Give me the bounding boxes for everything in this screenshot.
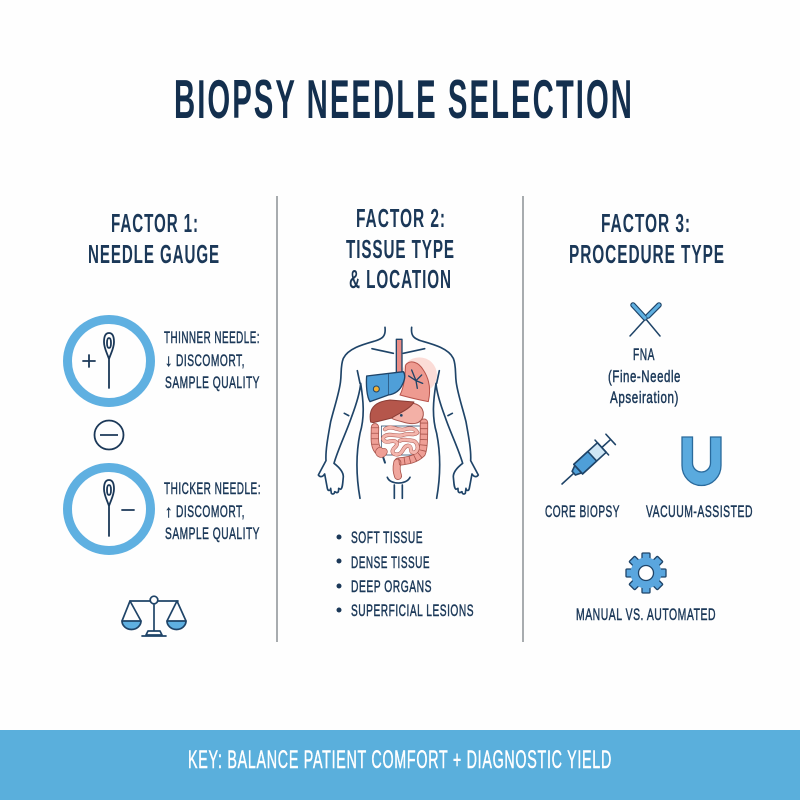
icon: gear — [626, 553, 666, 593]
label: FNA: FNA — [633, 345, 655, 364]
heading: factor 1: FACTOR 1: — [111, 208, 199, 238]
organ: liver — [366, 372, 405, 402]
organ: stomach — [391, 403, 423, 424]
label: core biopsy: CORE BIOPSY — [545, 502, 620, 521]
panel: factor 2 tissue type — [318, 203, 478, 620]
heading: factor 2: & LOCATION — [349, 264, 452, 294]
text: thicker needle: ↑ — [165, 502, 173, 521]
label: manual vs automated: MANUAL VS. AUTOMATED — [576, 605, 716, 624]
organ: lung glow — [402, 357, 437, 393]
organ: esophagus — [396, 339, 402, 373]
heading: factor 3 — [569, 208, 725, 269]
text: thinner needle: ↓ — [165, 351, 173, 370]
text: thicker needle: THICKER NEEDLE: — [164, 479, 261, 498]
text: thinner needle — [164, 328, 260, 392]
icon: crossed FNA needles — [630, 305, 660, 336]
organ: small intestine — [383, 428, 418, 454]
illustration: human torso with organs — [318, 327, 478, 498]
icon: thin needle in ring — [68, 320, 150, 402]
heading: factor 2 — [346, 203, 455, 294]
bullet list: tissue types: DEEP ORGANS — [351, 577, 432, 596]
label: FNA: Apseiration) — [610, 388, 679, 407]
icon: vacuum U-shape — [682, 437, 721, 486]
text: thinner needle: THINNER NEEDLE: — [164, 328, 260, 347]
organ: colon — [375, 423, 424, 476]
organ: lung — [400, 362, 430, 402]
heading: factor 2: FACTOR 2: — [356, 203, 446, 233]
tumor marker — [373, 386, 379, 392]
icon: thick needle in ring — [68, 468, 150, 550]
text: thinner needle: DISCOMORT, — [176, 351, 245, 370]
bullet list: tissue types — [336, 528, 474, 620]
text: thicker needle: DISCOMORT, — [176, 502, 245, 521]
bullet list: tissue types: SUPERFICIAL LESIONS — [351, 601, 474, 620]
panel: factor 1 needle gauge — [68, 208, 261, 636]
label: FNA: (Fine-Needle — [608, 367, 681, 386]
bullet list: tissue types: DENSE TISSUE — [351, 553, 430, 572]
heading: factor 2: TISSUE TYPE — [346, 234, 455, 264]
bronchi — [409, 370, 423, 388]
banner: key takeaway — [0, 730, 800, 800]
text: thinner needle: SAMPLE QUALITY — [165, 373, 260, 392]
icon: minus circle — [94, 420, 124, 450]
panel: factor 3 procedure type — [545, 208, 753, 624]
heading: factor 1: NEEDLE GAUGE — [88, 239, 220, 269]
heading: factor 1 — [88, 208, 220, 269]
text: thicker needle: SAMPLE QUALITY — [165, 524, 260, 543]
body outline — [318, 327, 478, 498]
bullet list: tissue types: SOFT TISSUE — [351, 528, 423, 547]
icon: syringe — [555, 432, 617, 491]
text: thicker needle — [164, 479, 261, 543]
icon: balance scales — [122, 596, 186, 636]
organ: second liver lobe — [370, 400, 414, 423]
label: FNA — [608, 345, 681, 407]
heading: factor 3: FACTOR 3: — [601, 208, 691, 238]
